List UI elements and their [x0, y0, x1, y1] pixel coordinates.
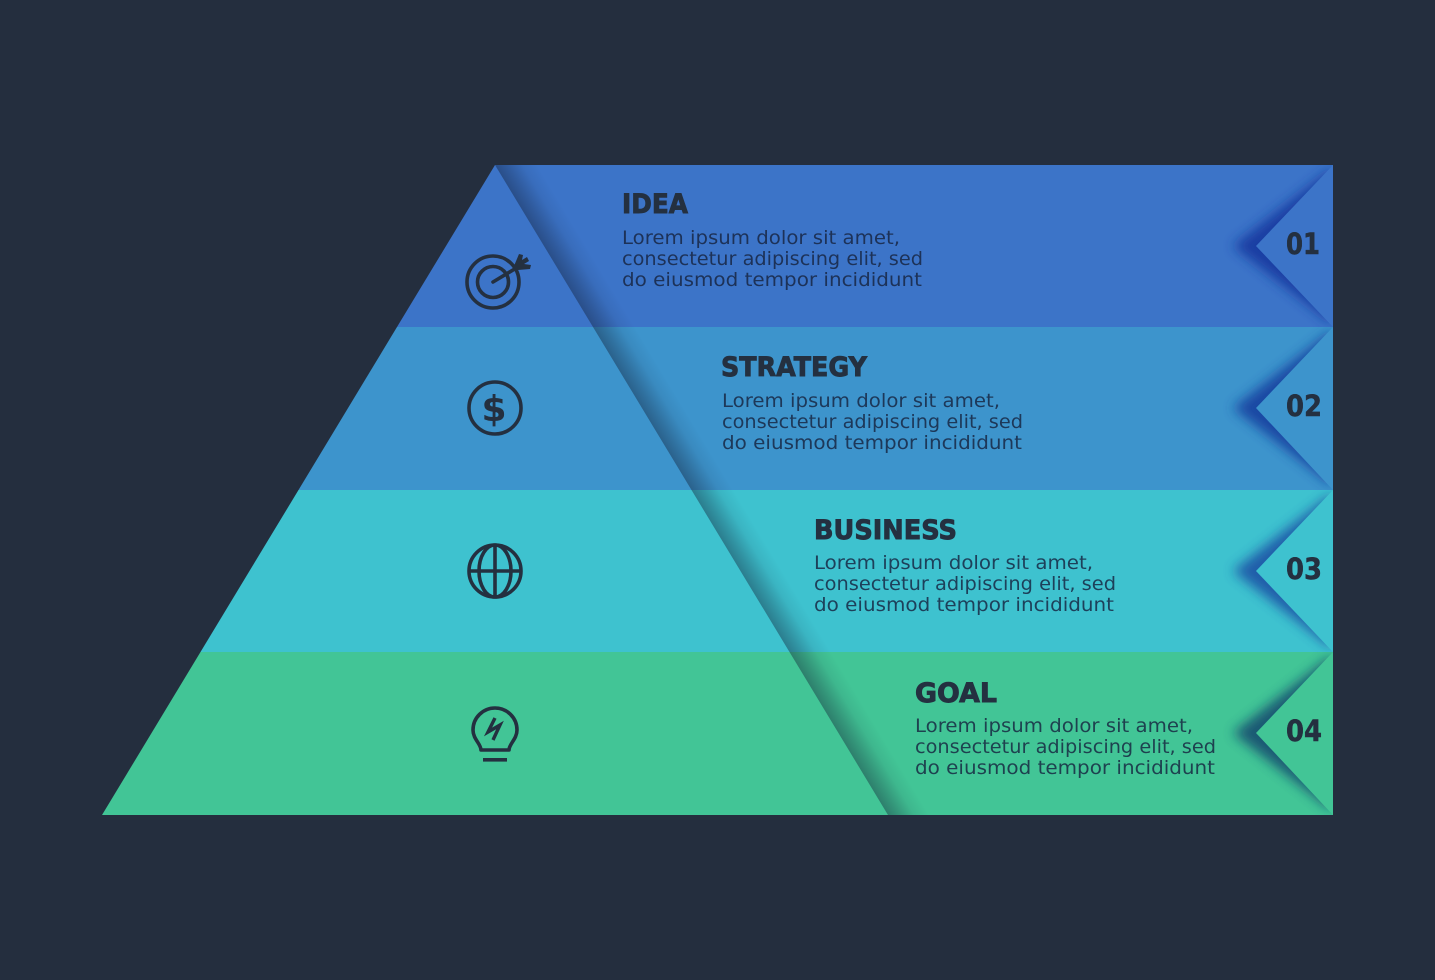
tier 4 band: [102, 652, 1333, 815]
tier 2 band: [298, 327, 1333, 490]
tier 1 body text: [622, 228, 923, 291]
tier 4 body text: Lorem ipsum dolor sit amet,: [915, 716, 1193, 737]
tier 1 body text: do eiusmod tempor incididunt: [622, 270, 922, 291]
tier 4 number: 04: [1286, 714, 1322, 748]
tier 1 number: 01: [1286, 227, 1320, 261]
tier 4 heading: GOAL: [915, 678, 997, 709]
tier 1 body text: Lorem ipsum dolor sit amet,: [622, 228, 900, 249]
tier 1 band: [397, 165, 1333, 327]
tier 3 body text: [814, 553, 1116, 616]
tier 3 body text: consectetur adipiscing elit, sed: [814, 574, 1116, 595]
tier 3 notch: [1256, 490, 1333, 652]
panel: tier 3 business: [200, 490, 1333, 652]
tier 4 body text: do eiusmod tempor incididunt: [915, 758, 1215, 779]
panel: tier 4 goal: [102, 652, 1333, 815]
tier 3 fold shadow: [692, 490, 836, 652]
tier 1 heading: IDEA: [622, 189, 688, 220]
icon: dollar coin: [469, 382, 521, 434]
tier 3 band: [200, 490, 1333, 652]
tier 4 body text: [915, 716, 1216, 779]
tier 4 notch: [1256, 652, 1333, 815]
icon: globe: [469, 545, 521, 597]
tier 1 fold shadow: [495, 165, 640, 327]
icon: light bulb with bolt: [473, 708, 517, 762]
tier 3 number: 03: [1286, 552, 1322, 586]
tier 2 heading: STRATEGY: [721, 352, 867, 383]
tier 4 notch shadow: [1233, 655, 1333, 811]
tier 1 notch shadow: [1233, 168, 1333, 324]
tier 3 heading: BUSINESS: [814, 515, 957, 546]
tier 2 fold shadow: [593, 327, 738, 490]
tier 2 notch shadow: [1233, 330, 1333, 486]
tier 2 body text: Lorem ipsum dolor sit amet,: [722, 391, 1000, 412]
tier 2 body text: do eiusmod tempor incididunt: [722, 433, 1022, 454]
tier 4 body text: consectetur adipiscing elit, sed: [915, 737, 1216, 758]
tier 3 body text: do eiusmod tempor incididunt: [814, 595, 1114, 616]
tier 2 number: 02: [1286, 389, 1322, 423]
panel: tier 1 idea: [397, 165, 1333, 327]
tier 4 fold shadow: [790, 652, 935, 815]
icon: target with arrow: [467, 254, 531, 308]
tier 2 notch: [1256, 327, 1333, 490]
tier 2 body text: consectetur adipiscing elit, sed: [722, 412, 1023, 433]
tier 2 body text: [722, 391, 1023, 454]
infographic: pyramid with four tiers: [102, 165, 1333, 815]
tier 3 body text: Lorem ipsum dolor sit amet,: [814, 553, 1093, 574]
icon: dollar coin: $: [481, 389, 507, 430]
panel: tier 2 strategy: [298, 327, 1333, 490]
tier 1 notch: [1256, 165, 1333, 327]
tier 1 body text: consectetur adipiscing elit, sed: [622, 249, 923, 270]
tier 3 notch shadow: [1233, 493, 1333, 649]
